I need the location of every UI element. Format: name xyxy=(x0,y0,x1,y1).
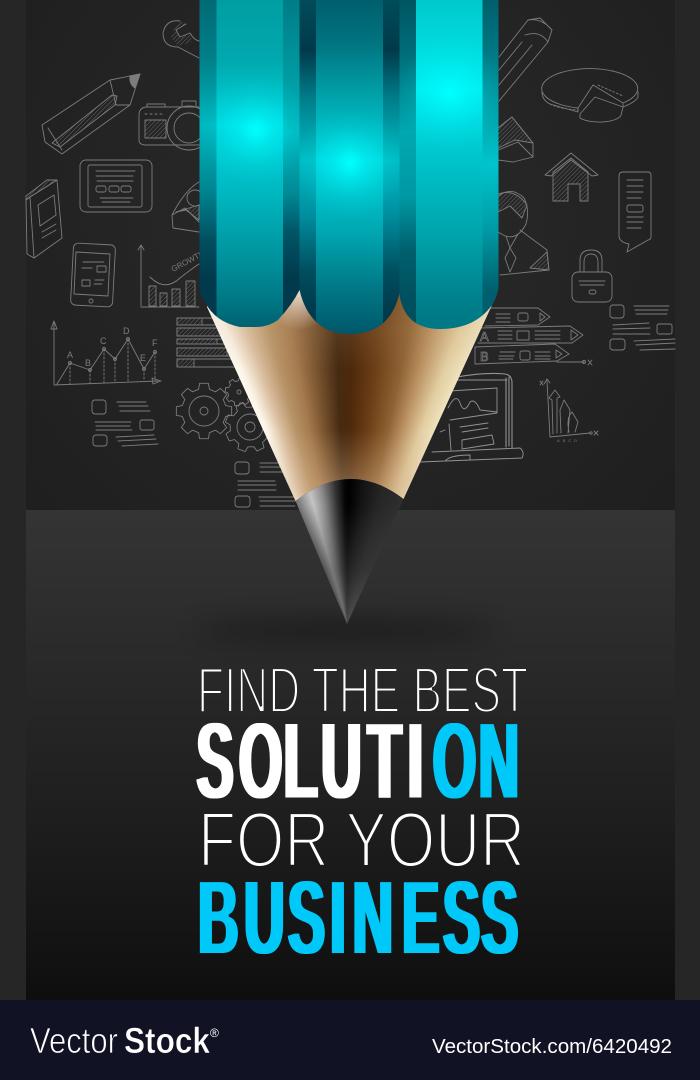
icon: wrench xyxy=(163,21,199,58)
line chart: A xyxy=(67,350,73,360)
pencil column center xyxy=(299,0,400,340)
small arrow chart xyxy=(540,379,598,443)
line chart: B xyxy=(85,358,91,368)
icon: camera xyxy=(139,101,211,150)
graphite tip xyxy=(296,479,404,624)
heading: FOR YOUR: FOR YOUR xyxy=(198,796,525,884)
icon: gears xyxy=(176,376,282,459)
footer bar xyxy=(0,1000,700,1080)
arrow banners: B xyxy=(480,349,489,364)
growth chart xyxy=(138,245,206,307)
speech bubble phone xyxy=(619,172,651,252)
small arrow chart: ABCD xyxy=(557,438,580,443)
line chart: D xyxy=(123,326,130,336)
line chart: E xyxy=(140,353,146,363)
line chart xyxy=(51,321,161,385)
icon: pencil sketch xyxy=(42,74,140,154)
heading: SOLUTION: ON xyxy=(433,700,519,822)
icon: padlock xyxy=(572,250,612,302)
footer logo: Stock: Stock xyxy=(124,1020,211,1061)
icon: tablet xyxy=(80,160,152,212)
footer logo: Vector: Vector xyxy=(30,1020,118,1061)
heading: BUSINESS: BUSINESS xyxy=(198,858,518,977)
progress bars xyxy=(177,318,260,367)
line chart: C xyxy=(100,336,107,346)
envelope hatched xyxy=(498,117,533,162)
list block left xyxy=(92,400,158,446)
doodle collection xyxy=(26,18,675,507)
footer logo: registered mark: ® xyxy=(210,1026,219,1040)
pencil body: three cyan columns xyxy=(200,0,498,334)
icon: house xyxy=(545,153,598,201)
upper chalkboard panel xyxy=(26,0,675,510)
arrow banners xyxy=(475,308,592,365)
lower panel xyxy=(26,510,675,1000)
heading: SOLUTION: SOLUTI xyxy=(196,700,423,822)
heading: FIND THE BEST: FIND THE BEST xyxy=(197,654,528,726)
pie chart xyxy=(542,69,638,122)
growth chart: GROWTH xyxy=(170,249,206,274)
line chart: F xyxy=(152,338,158,348)
icon: phone xyxy=(70,243,116,307)
footer url: VectorStock.com/6420492 xyxy=(432,1036,672,1058)
list block right xyxy=(610,305,675,350)
icon: pencil top right xyxy=(499,18,552,101)
pencil column left xyxy=(199,0,300,340)
icon: laptop xyxy=(420,373,523,462)
pencil column right xyxy=(399,0,499,340)
icon: book xyxy=(26,180,62,258)
pencil shadow xyxy=(195,621,495,639)
arrow banners: A xyxy=(480,329,489,344)
icon: envelope xyxy=(172,182,203,232)
list block center xyxy=(235,462,295,507)
person icon xyxy=(498,191,549,275)
pencil wood cone xyxy=(207,290,492,501)
